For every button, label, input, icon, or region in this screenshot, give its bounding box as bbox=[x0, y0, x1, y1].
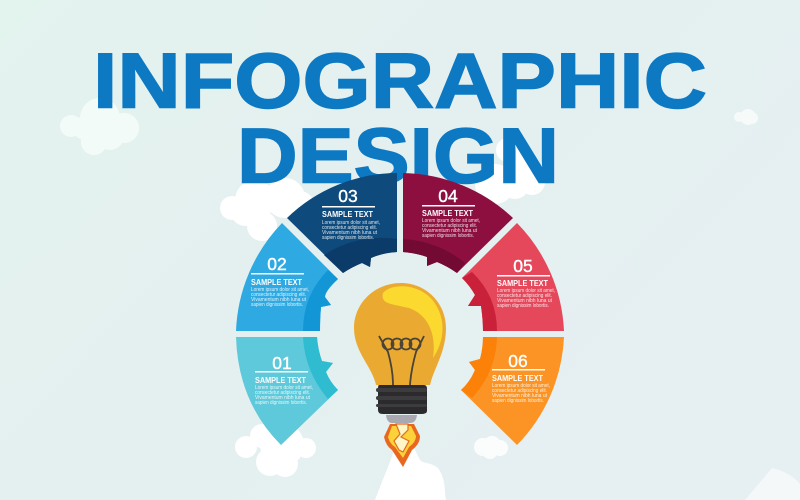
panel: segment 02: sapien dignissim lobortis. bbox=[251, 302, 303, 308]
panel: segment 01: Vivamentum nibh luna ut bbox=[255, 395, 311, 401]
cloud: upper left bbox=[60, 98, 139, 155]
panel: segment 02: SAMPLE TEXT bbox=[251, 277, 303, 287]
icon: light bulb rocket bbox=[354, 283, 446, 467]
panel: segment 02: Vivamentum nibh luna ut bbox=[251, 297, 307, 303]
panel: segment 02: Lorem ipsum dolor sit amet, bbox=[251, 287, 309, 293]
panel: segment 04: sapien dignissim lobortis. bbox=[422, 233, 474, 239]
bulb screw base bbox=[378, 385, 427, 414]
panel: segment 03: 03 bbox=[338, 186, 358, 206]
panel: segment 05: SAMPLE TEXT bbox=[497, 278, 549, 288]
cloud: behind segment 01 bbox=[235, 423, 316, 477]
panel: segment 03: Vivamentum nibh luna ut bbox=[322, 230, 378, 236]
panel: segment 06: consectetur adipiscing elit. bbox=[492, 388, 547, 394]
panel: segment 04: Vivamentum nibh luna ut bbox=[422, 228, 478, 234]
panel: segment 06: sapien dignissim lobortis. bbox=[492, 398, 544, 404]
filament bbox=[379, 336, 424, 385]
panel: segment 03: Lorem ipsum dolor sit amet, bbox=[322, 220, 380, 226]
rocket smoke bbox=[375, 420, 446, 500]
cloud: bottom right corner bbox=[745, 468, 800, 500]
panel: segment 05: 05 bbox=[513, 256, 533, 276]
cloud: behind segment 03 bbox=[220, 178, 314, 241]
panel: segment 01 bbox=[236, 337, 338, 445]
panel: segment 06: Vivamentum nibh luna ut bbox=[492, 393, 548, 399]
panel: segment 05: sapien dignissim lobortis. bbox=[497, 303, 549, 309]
panel: segment 06 bbox=[461, 337, 564, 445]
panel: segment 03 bbox=[287, 173, 397, 273]
panel: segment 03: consectetur adipiscing elit. bbox=[322, 225, 377, 231]
panel: segment 04 bbox=[403, 173, 513, 273]
panel: segment 01: sapien dignissim lobortis. bbox=[255, 400, 307, 406]
panel: segment 02: consectetur adipiscing elit. bbox=[251, 292, 306, 298]
bulb neck bbox=[386, 415, 417, 423]
panel: segment 01: consectetur adipiscing elit. bbox=[255, 390, 310, 396]
panel: segment 01: 01 bbox=[272, 353, 292, 373]
cloud: lower right bbox=[474, 436, 508, 459]
panel: segment 03: sapien dignissim lobortis. bbox=[322, 235, 374, 241]
panel: segment 05: Vivamentum nibh luna ut bbox=[497, 298, 553, 304]
panel: segment 04: Lorem ipsum dolor sit amet, bbox=[422, 218, 480, 224]
cloud: upper right bbox=[734, 109, 758, 125]
panel: segment 02: 02 bbox=[267, 254, 287, 274]
bulb highlight bbox=[383, 286, 443, 358]
panel: segment 04: consectetur adipiscing elit. bbox=[422, 223, 477, 229]
cloud: behind title N bbox=[475, 138, 545, 204]
bulb glass bbox=[354, 283, 446, 385]
panel: segment 06: SAMPLE TEXT bbox=[492, 373, 544, 383]
panel: segment 05: consectetur adipiscing elit. bbox=[497, 293, 552, 299]
title: INFOGRAPHIC bbox=[93, 36, 707, 124]
panel: segment 02 bbox=[236, 223, 338, 331]
title bbox=[93, 36, 707, 199]
panel: segment 03: SAMPLE TEXT bbox=[322, 209, 374, 219]
panel: segment 04: 04 bbox=[438, 186, 458, 206]
title: DESIGN bbox=[237, 111, 559, 199]
panel: segment 05 bbox=[462, 223, 564, 331]
flame bbox=[384, 424, 420, 467]
panel: segment 01: SAMPLE TEXT bbox=[255, 375, 307, 385]
panel: segment 05: Lorem ipsum dolor sit amet, bbox=[497, 288, 555, 294]
panel: segment 04: SAMPLE TEXT bbox=[422, 208, 474, 218]
panel: segment 06: 06 bbox=[508, 351, 528, 371]
panel: segment 06: Lorem ipsum dolor sit amet, bbox=[492, 383, 550, 389]
panel: segment 01: Lorem ipsum dolor sit amet, bbox=[255, 385, 313, 391]
